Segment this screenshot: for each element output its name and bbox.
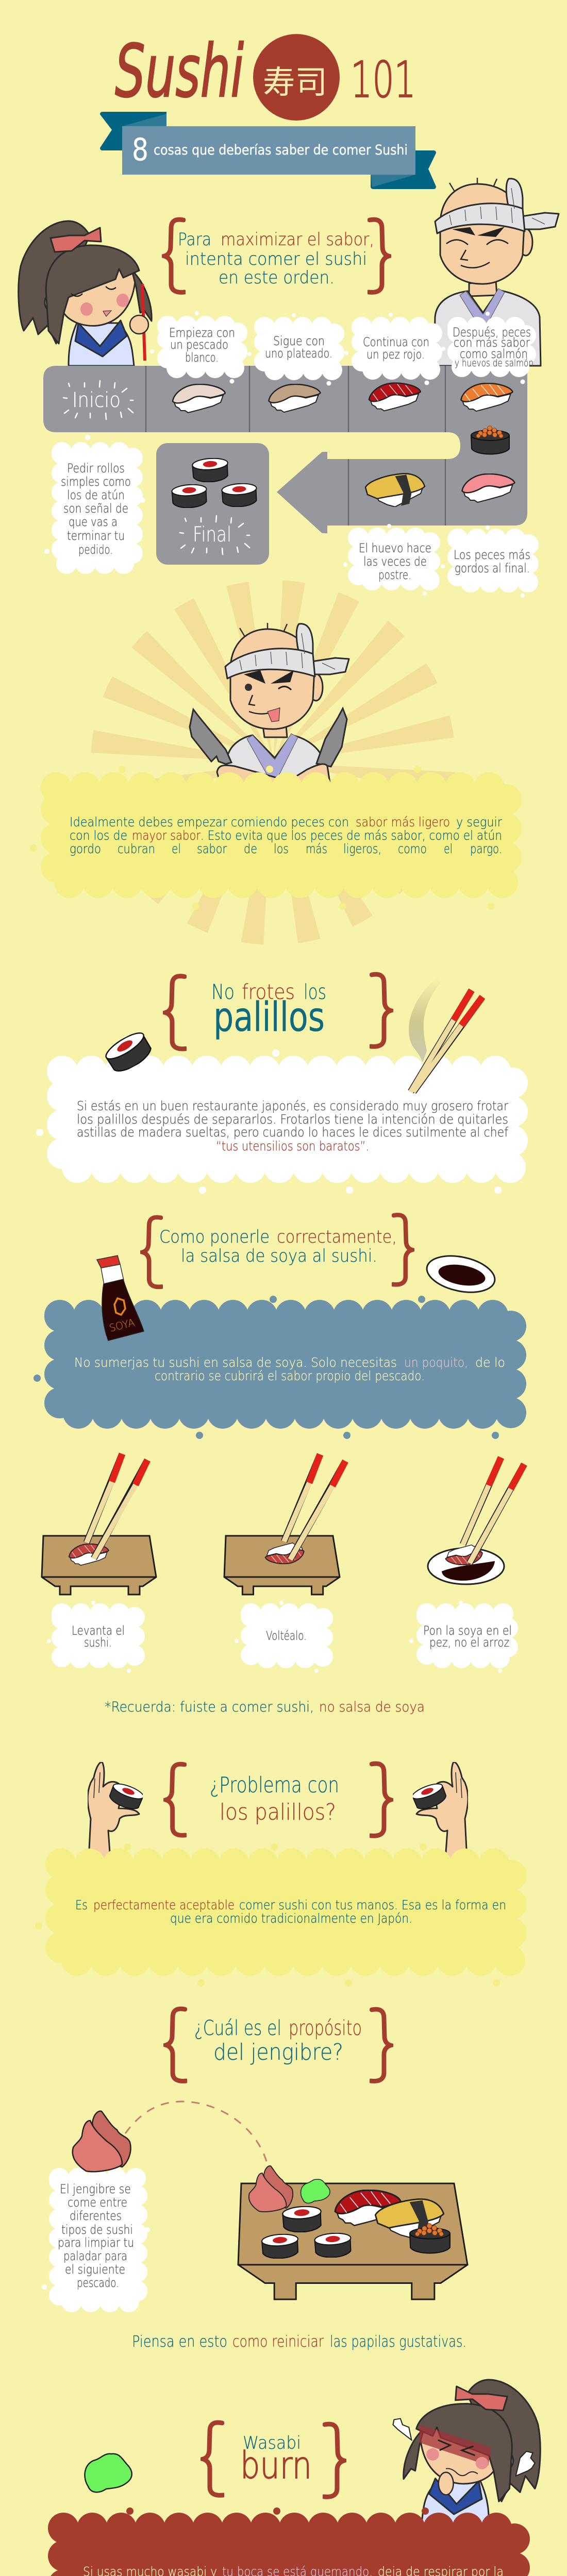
title bbox=[115, 29, 416, 121]
reminder text: *Recuerda: fuiste a comer sushi, bbox=[105, 1699, 314, 1715]
panel: eating order: sabor más ligero bbox=[356, 815, 450, 829]
caption: flip: Voltéalo. bbox=[266, 1629, 307, 1643]
heading: wasabi burn bbox=[203, 2422, 344, 2497]
step 1: lift the sushi bbox=[42, 1454, 156, 1595]
title: 寿司 bbox=[263, 65, 327, 100]
bubble: white fish: blanco. bbox=[185, 350, 219, 365]
heading: soy sauce: la salsa de soya al sushi. bbox=[181, 1246, 377, 1266]
panel: eat by hand: Es bbox=[75, 1897, 88, 1912]
bubble: ginger text: diferentes bbox=[70, 2209, 122, 2223]
panel: eating order: el bbox=[172, 841, 181, 856]
panel: eating order: ligeros, bbox=[343, 841, 381, 856]
panel: chopsticks advice: “tus utensilios son baratos”. bbox=[216, 1139, 369, 1154]
reminder text: no salsa de soya bbox=[319, 1699, 425, 1715]
heading: ginger bbox=[166, 2009, 391, 2081]
heading: wasabi burn: burn bbox=[240, 2444, 312, 2487]
heading: palillos: palillos bbox=[213, 994, 325, 1041]
end label bbox=[180, 516, 249, 554]
subtitle ribbon bbox=[100, 112, 436, 189]
panel: soy sauce advice bbox=[34, 1296, 511, 1439]
sushi sequence bbox=[172, 383, 514, 507]
icon: soy bottle bbox=[97, 1256, 144, 1341]
heading: ginger: propósito bbox=[289, 2016, 362, 2040]
heading: soy sauce: Como ponerle bbox=[159, 1227, 270, 1247]
heading: wasabi burn: Wasabi bbox=[243, 2433, 301, 2453]
bubble: red fish: Continua con bbox=[363, 335, 429, 349]
ginger closing line: Piensa en esto bbox=[132, 2333, 227, 2351]
panel: chopsticks advice: astillas de madera sueltas, pero cuando lo haces le dices sutilmente al chef bbox=[77, 1125, 508, 1140]
panel: eating order: más bbox=[306, 841, 327, 856]
bubble: egg: las veces de bbox=[363, 554, 427, 569]
step 3: dip in soy bbox=[428, 1458, 524, 1584]
bubble dots bbox=[44, 311, 525, 598]
icon: right hand with roll bbox=[410, 1762, 468, 1859]
panel: eat by hand: perfectamente aceptable bbox=[93, 1897, 235, 1912]
bubble: silver fish: uno plateado. bbox=[265, 346, 332, 361]
icon: soy bottle: SOYA bbox=[108, 1316, 136, 1334]
bubble: ginger text: come entre bbox=[68, 2195, 127, 2210]
panel: soy sauce advice: un poquito, bbox=[404, 1355, 468, 1370]
panel: eating order bbox=[30, 766, 506, 910]
bubble: fatty fish bbox=[454, 539, 530, 582]
heading: ginger: ¿Cuál es el bbox=[194, 2016, 281, 2040]
panel: eating order: los bbox=[274, 841, 289, 856]
panel: eating order: sabor bbox=[197, 841, 227, 856]
bubble: ginger text: El jengibre se bbox=[60, 2182, 131, 2196]
end label: Final bbox=[193, 523, 231, 547]
caption: lift: Levanta el bbox=[72, 1623, 125, 1638]
panel: eat by hand: comer sushi con tus manos. Esa es la forma en bbox=[239, 1897, 506, 1912]
caption: soy on fish: pez, no el arroz bbox=[429, 1635, 509, 1650]
bubble: simple rolls: Pedir rollos bbox=[67, 461, 125, 476]
heading: soy sauce bbox=[143, 1215, 412, 1287]
bubble: stronger fish: como salmón bbox=[460, 347, 528, 361]
panel: soy sauce advice: No sumerjas tu sushi en salsa de soya. Solo necesitas bbox=[74, 1355, 397, 1370]
heading: order: en este orden. bbox=[219, 267, 335, 288]
heading: order: intenta comer el sushi bbox=[185, 249, 367, 269]
heading: palillos: frotes bbox=[242, 980, 295, 1004]
heading: palillos: No bbox=[211, 980, 235, 1004]
caption: soy on fish bbox=[423, 1614, 512, 1658]
ginger closing line: las papilas gustativas. bbox=[330, 2333, 466, 2351]
panel: eating order: de bbox=[244, 841, 257, 856]
caption: flip bbox=[251, 1614, 323, 1658]
panel: eating order: . Esto evita que los peces de más sabor, como el atún bbox=[201, 828, 502, 843]
bubble: ginger text: el siguiente bbox=[65, 2262, 125, 2277]
icon: ginger bbox=[73, 2111, 131, 2172]
bubble: ginger text: para limpiar tu bbox=[58, 2235, 134, 2250]
panel: eating order: Idealmente debes empezar comiendo peces con bbox=[70, 815, 349, 829]
bubble: stronger fish: con más sabor bbox=[454, 335, 530, 350]
panel: eat by hand: que era comido tradicionalmente en Japón. bbox=[170, 1911, 412, 1926]
bubble: egg bbox=[358, 538, 431, 582]
icon: chopsticks rubbing bbox=[411, 990, 482, 1092]
heading: order: maximizar el sabor, bbox=[221, 229, 374, 250]
heading: soy sauce: correctamente, bbox=[277, 1227, 397, 1247]
bubble: white fish: Empieza con bbox=[169, 326, 235, 340]
heading: ginger: del jengibre? bbox=[213, 2039, 343, 2065]
bubble: ginger text: tipos de sushi bbox=[61, 2223, 133, 2237]
caption dots bbox=[47, 1601, 502, 1673]
bubble: simple rolls: que vas a bbox=[69, 515, 118, 529]
icon: left hand with roll bbox=[88, 1762, 146, 1859]
bubble: stronger fish: y huevos de salmón bbox=[455, 358, 533, 369]
panel: soy sauce advice: contrario se cubrirá el sabor propio del pescado. bbox=[155, 1368, 425, 1383]
title: 101 bbox=[351, 51, 416, 109]
bubble: simple rolls: terminar tu bbox=[67, 529, 125, 543]
bubble: silver fish: Sigue con bbox=[273, 334, 325, 348]
start label: Inicio bbox=[72, 388, 121, 412]
panel: eating order: mayor sabor bbox=[132, 828, 201, 843]
panel: eat by hand bbox=[35, 1843, 511, 1987]
heading: order: Para bbox=[178, 229, 211, 250]
panel: eating order: el bbox=[444, 841, 453, 856]
panel: chopsticks advice: Si estás en un buen restaurante japonés, es considerado muy grosero frotar bbox=[77, 1098, 509, 1113]
panel: soy sauce advice: de lo bbox=[475, 1355, 505, 1370]
panel: wasabi advice bbox=[37, 2507, 514, 2576]
title: Sushi bbox=[115, 29, 244, 114]
panel: chopsticks advice bbox=[36, 1049, 512, 1194]
subtitle ribbon: 8 bbox=[132, 132, 148, 168]
knife bbox=[190, 709, 231, 764]
caption: lift: sushi. bbox=[84, 1635, 112, 1650]
panel: eating order: cubran bbox=[118, 841, 155, 856]
panel: eating order: y seguir bbox=[456, 815, 503, 829]
bubble: red fish bbox=[362, 327, 432, 369]
caption: soy on fish: Pon la soya en el bbox=[423, 1623, 512, 1638]
sun rays bbox=[177, 667, 369, 858]
bubble: ginger text bbox=[42, 2178, 150, 2302]
bubble: stronger fish: Después, peces bbox=[453, 325, 531, 340]
start label bbox=[63, 381, 133, 419]
character: girl with chopsticks bbox=[19, 221, 152, 366]
icon: maki roll bbox=[102, 1028, 155, 1076]
step 2: flip bbox=[224, 1454, 345, 1595]
heading: hands: los palillos? bbox=[220, 1799, 336, 1825]
panel: chopsticks advice: los palillos después de separarlos. Frotarlos tiene la intención de quitarles bbox=[77, 1112, 508, 1127]
character: chef smiling bbox=[434, 178, 559, 366]
icon: smoke bbox=[409, 977, 441, 1062]
character: girl with wasabi burn bbox=[393, 2380, 540, 2523]
bubble: white fish: un pescado bbox=[170, 337, 228, 352]
bubble: white fish bbox=[168, 326, 237, 368]
heading: hands bbox=[166, 1764, 391, 1836]
ginger closing line bbox=[132, 2333, 466, 2351]
panel: eating order: pargo. bbox=[470, 841, 502, 856]
heading: palillos: los bbox=[304, 980, 326, 1004]
bubble: ginger text: pescado. bbox=[77, 2276, 119, 2290]
bubble: silver fish bbox=[264, 327, 334, 370]
panel: eating order: con los de bbox=[70, 828, 127, 843]
bubble: egg: postre. bbox=[378, 568, 411, 582]
bubble: fatty fish: Los peces más bbox=[454, 548, 530, 562]
bubble: simple rolls: son señal de bbox=[63, 501, 128, 516]
bubble: simple rolls: pedido. bbox=[78, 543, 113, 557]
arrow: ginger arc bbox=[125, 2102, 268, 2165]
icon: wasabi bbox=[85, 2454, 132, 2492]
panel: eating order: gordo bbox=[70, 841, 101, 856]
knife bbox=[316, 708, 347, 767]
bubble: stronger fish bbox=[453, 325, 533, 369]
bubble: simple rolls bbox=[61, 452, 132, 564]
icon: soy dish bbox=[424, 1250, 498, 1298]
panel: eating order: como bbox=[398, 841, 427, 856]
bubble: egg: El huevo hace bbox=[359, 541, 431, 555]
caption: lift bbox=[62, 1614, 135, 1658]
bubble: simple rolls: simples como bbox=[61, 474, 131, 489]
bubble: simple rolls: los de atún bbox=[67, 488, 125, 502]
arms bbox=[217, 764, 330, 783]
character: chef with knives bbox=[190, 623, 349, 783]
heading: order bbox=[164, 219, 389, 292]
flow path bbox=[43, 366, 527, 565]
sushi table bbox=[238, 2166, 468, 2299]
bubble: fatty fish: gordos al final. bbox=[455, 561, 530, 575]
bubble: ginger text: paladar para bbox=[63, 2249, 127, 2263]
bubble: red fish: un pez rojo. bbox=[366, 347, 425, 362]
ginger closing line: como reiniciar bbox=[232, 2333, 324, 2351]
heading: palillos bbox=[165, 974, 391, 1049]
subtitle ribbon: cosas que deberías saber de comer Sushi bbox=[154, 142, 408, 158]
heading: hands: ¿Problema con bbox=[210, 1772, 339, 1798]
